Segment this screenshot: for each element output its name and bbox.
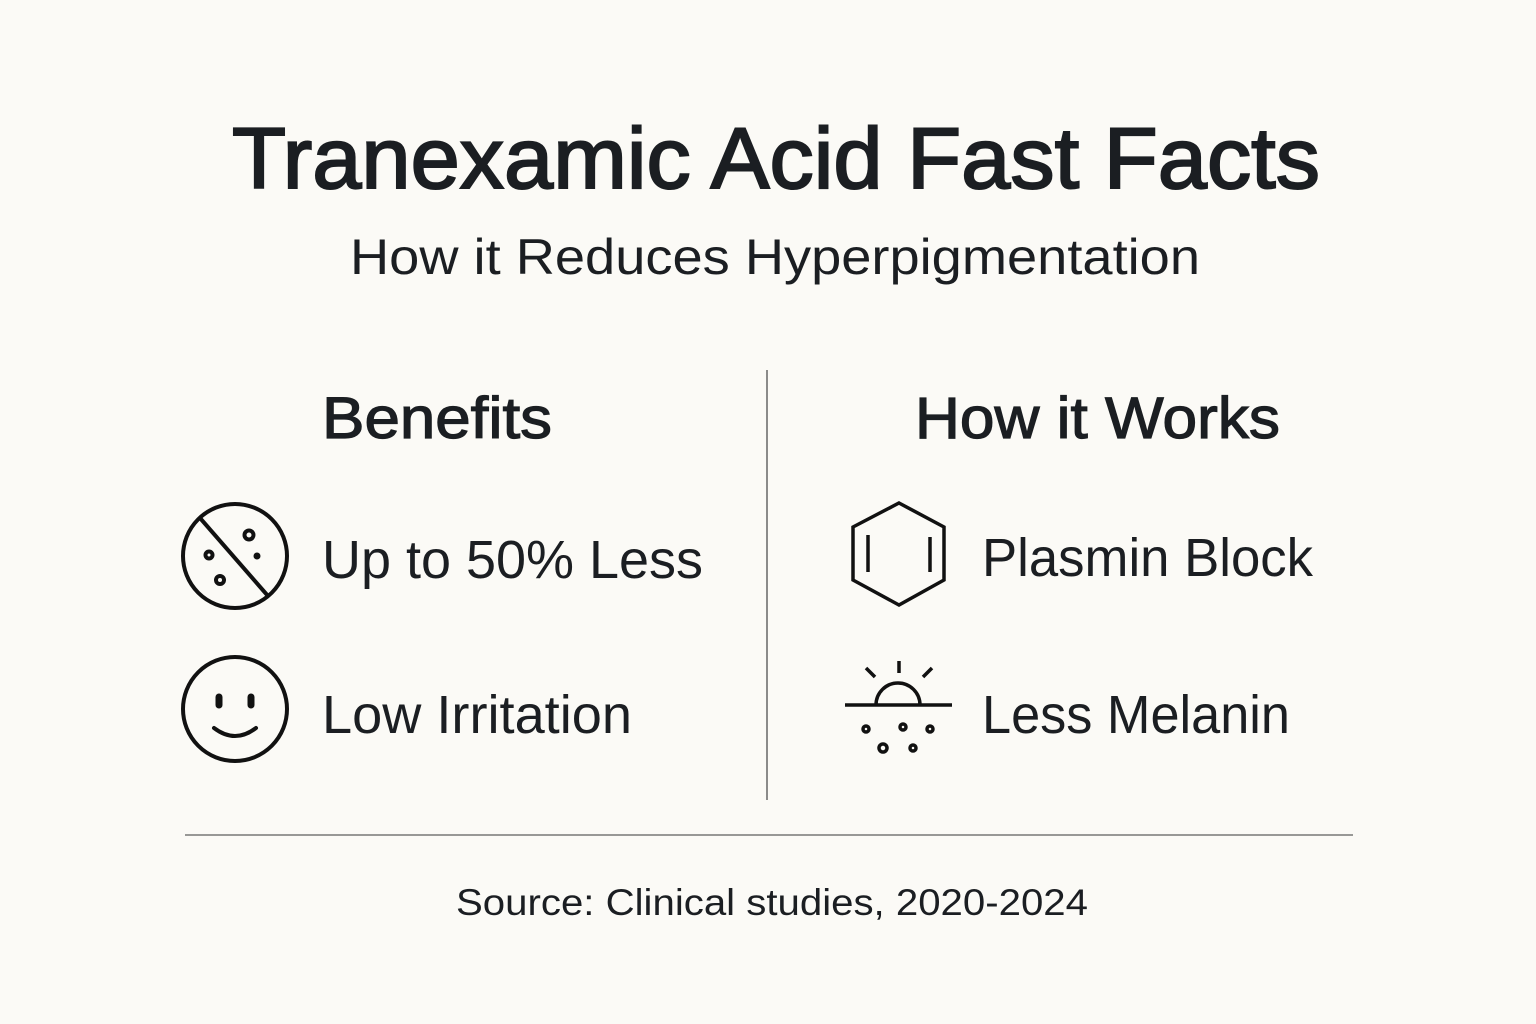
panel: how it works — [845, 386, 1314, 752]
icon: smiley — [183, 657, 287, 761]
text: low irritation: Low Irritation — [322, 685, 632, 745]
icon: sun melanin — [845, 661, 952, 752]
panel: benefits — [183, 386, 703, 761]
source note: Source: Clinical studies, 2020-2024 — [456, 882, 1088, 923]
text: less melanin: Less Melanin — [982, 685, 1290, 745]
icon: hexagon — [853, 503, 944, 605]
icon: no spots — [183, 504, 287, 608]
heading: benefits: Benefits — [322, 386, 552, 451]
text: plasmin block: Plasmin Block — [982, 528, 1314, 588]
heading: how it works: How it Works — [915, 386, 1280, 451]
title: Tranexamic Acid Fast Facts — [232, 111, 1320, 207]
text: up to 50% less: Up to 50% Less — [322, 530, 703, 590]
subtitle: How it Reduces Hyperpigmentation — [350, 229, 1200, 285]
